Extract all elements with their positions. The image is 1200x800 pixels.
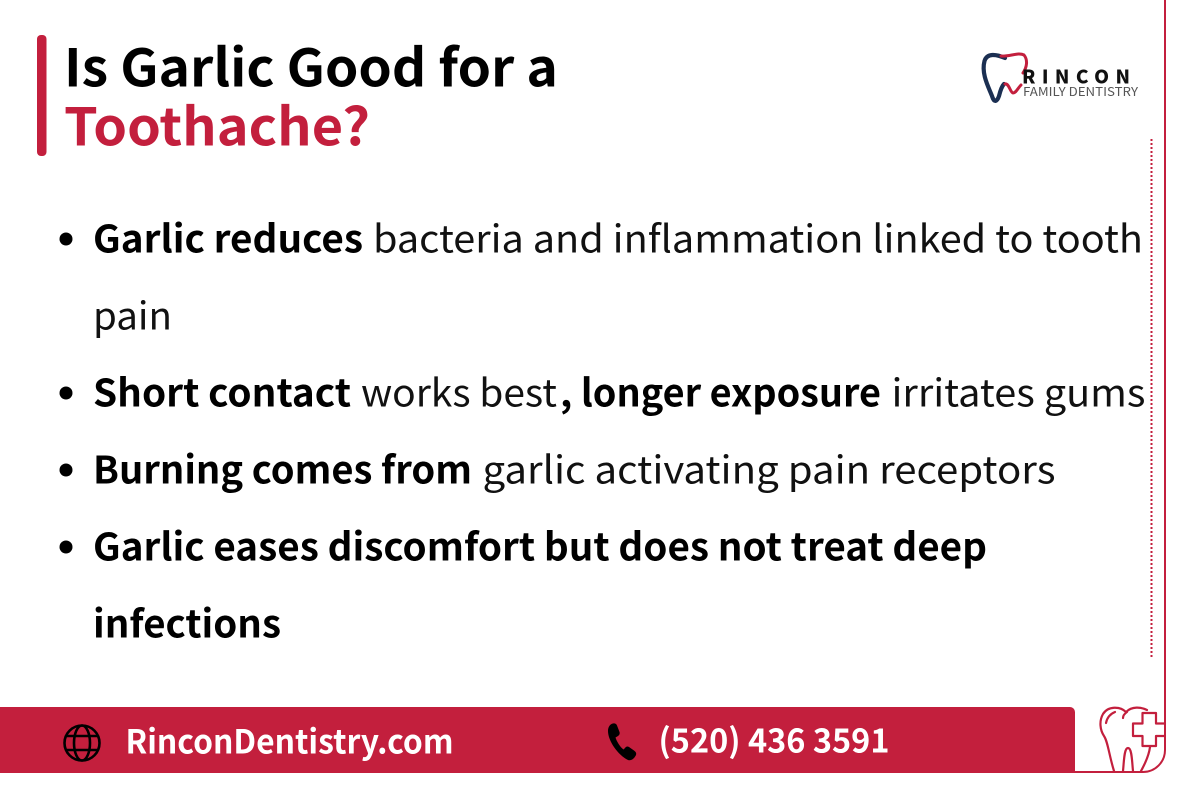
bullet 2: irritates gums	[892, 362, 1146, 418]
bullet 2: , longer exposure	[560, 362, 881, 418]
logo: Rincon Family Dentistry: RINCON	[1022, 62, 1130, 90]
bullet 2: Short contact	[93, 362, 351, 418]
bullet 4	[60, 516, 987, 648]
icon: globe	[64, 726, 100, 760]
bullet 1	[60, 208, 1143, 340]
footer contact bar	[0, 707, 1075, 773]
dotted side line	[1150, 139, 1152, 657]
bullet 3: garlic activating pain receptors	[482, 440, 1056, 494]
website: RinconDentistry.com	[126, 716, 454, 764]
logo: Rincon Family Dentistry	[984, 54, 1139, 101]
phone number: (520) 436 3591	[658, 714, 890, 762]
bullet 4: Garlic eases discomfort but does not treat deep	[93, 516, 987, 572]
title: Toothache?	[64, 86, 370, 160]
icon: tooth with medical cross	[1100, 708, 1165, 771]
bullet 1: Garlic reduces	[93, 208, 363, 264]
bullet 3: Burning comes from	[93, 440, 472, 494]
icon: phone	[608, 723, 636, 760]
title: Is Garlic Good for a	[64, 26, 558, 102]
bullet 2	[60, 362, 1146, 418]
bullet 1: bacteria and inflammation linked to tooth	[373, 208, 1143, 264]
bullet 2: works best	[361, 362, 557, 418]
page frame line	[1075, 0, 1165, 772]
title accent bar	[37, 35, 46, 156]
bullet 1: pain	[93, 286, 172, 340]
bullet 4: infections	[93, 594, 281, 648]
logo tooth mark	[984, 54, 1027, 101]
logo: Rincon Family Dentistry: FAMILY DENTISTRY	[1023, 83, 1139, 100]
bullet list	[60, 208, 1146, 648]
title	[64, 26, 558, 160]
bullet 3	[60, 440, 1056, 494]
